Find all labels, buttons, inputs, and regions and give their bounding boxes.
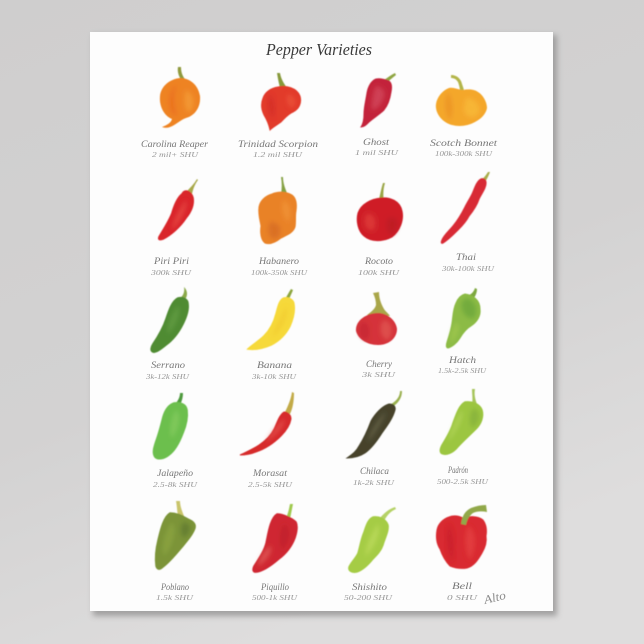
label: Scotch Bonnet (430, 138, 498, 158)
label: Morasat: Morasat (252, 468, 288, 478)
label: Trinidad Scorpion (238, 139, 319, 159)
label: Ghost: Ghost (363, 137, 390, 147)
pepper: Ghost (361, 73, 396, 127)
label: Hatch: Hatch (448, 355, 477, 365)
label: Hatch: 1.5k-2.5k SHU (438, 367, 487, 375)
label: Shishito: 50-200 SHU (344, 594, 393, 602)
label: Chilaca: Chilaca (360, 466, 390, 476)
label: Carolina Reaper: 2 mil+ SHU (152, 151, 199, 159)
label: Scotch Bonnet: Scotch Bonnet (430, 138, 498, 148)
poster sheet (90, 32, 553, 611)
label: Chilaca: 1k-2k SHU (353, 479, 395, 487)
label: Bell: Bell (452, 581, 473, 591)
pepper: Piri Piri (159, 179, 198, 240)
label: Bell (447, 581, 478, 602)
label: Trinidad Scorpion: Trinidad Scorpion (238, 139, 319, 149)
label: Scotch Bonnet: 100k-300k SHU (435, 150, 493, 158)
label: Habanero (251, 256, 308, 277)
label: Cherry: Cherry (366, 359, 392, 369)
label: Shishito (344, 582, 393, 602)
label: Cherry: 3k SHU (360, 371, 396, 379)
label: Jalapeño: 2.5-8k SHU (153, 481, 198, 489)
pepper: Scotch Bonnet (436, 75, 487, 126)
pepper: Poblano (156, 501, 195, 569)
label: Padrón: 500-2.5k SHU (437, 478, 489, 486)
pepper: Habanero (259, 177, 296, 244)
pepper: Shishito (349, 507, 396, 572)
label: Piquillo: Piquillo (260, 582, 289, 592)
label: Serrano: 3k-12k SHU (145, 373, 190, 381)
label: Habanero: 100k-350k SHU (251, 269, 308, 277)
label: Bell: 0 SHU (447, 594, 478, 602)
pepper: Piquillo (253, 504, 297, 572)
label: Piri Piri: Piri Piri (153, 256, 190, 266)
pepper: Carolina Reaper (160, 67, 200, 128)
label: Rocoto (358, 256, 400, 277)
label: Poblano (156, 582, 194, 602)
pepper: Thai (441, 172, 490, 243)
label: Carolina Reaper: Carolina Reaper (141, 139, 209, 149)
label: Trinidad Scorpion: 1.2 mil SHU (253, 151, 303, 159)
pepper: Chilaca (347, 391, 402, 458)
pepper: Bell (436, 505, 487, 568)
pepper: Jalapeño (153, 393, 187, 459)
label: Serrano: Serrano (151, 360, 186, 370)
label: Habanero: Habanero (258, 256, 300, 266)
label: Banana (251, 360, 297, 381)
label: Rocoto: 100k SHU (358, 269, 400, 277)
pepper: Cherry (356, 292, 397, 345)
label: Padrón (437, 465, 489, 486)
label: Shishito: Shishito (352, 582, 388, 592)
artist signature: Alto (481, 588, 507, 607)
label: Hatch (438, 355, 487, 375)
label: Ghost (355, 137, 399, 157)
label: Jalapeño: Jalapeño (157, 468, 194, 478)
label: Banana: Banana (257, 360, 293, 370)
label: Chilaca (353, 466, 395, 487)
pepper: Morasat (240, 392, 294, 455)
pepper: Rocoto (357, 183, 403, 241)
pepper: Trinidad Scorpion (262, 73, 301, 130)
label: Rocoto: Rocoto (364, 256, 394, 266)
pepper: Hatch (446, 288, 480, 348)
label: Thai: Thai (456, 252, 477, 262)
label: Carolina Reaper (141, 139, 209, 159)
label: Piquillo: 500-1k SHU (252, 594, 298, 602)
label: Poblano: Poblano (160, 582, 189, 592)
label: Banana: 3k-10k SHU (251, 373, 297, 381)
pepper: Padrón (440, 389, 483, 454)
label: Morasat: 2.5-5k SHU (248, 481, 293, 489)
poster shadow (93, 35, 557, 616)
label: Padrón: Padrón (447, 465, 468, 475)
label: Piri Piri (150, 256, 192, 277)
label: Poblano: 1.5k SHU (156, 594, 194, 602)
label: Jalapeño (153, 468, 198, 489)
label: Morasat (248, 468, 293, 489)
label: Thai: 30k-100k SHU (441, 265, 495, 273)
pepper: Serrano (151, 287, 188, 352)
label: Cherry (360, 359, 396, 379)
pepper: Banana (248, 289, 294, 349)
label: Serrano (145, 360, 190, 381)
label: Piquillo (252, 582, 298, 602)
label: Ghost: 1 mil SHU (355, 149, 399, 157)
title: Pepper Varieties (265, 40, 372, 59)
label: Piri Piri: 300k SHU (150, 269, 192, 277)
label: Thai (441, 252, 495, 273)
